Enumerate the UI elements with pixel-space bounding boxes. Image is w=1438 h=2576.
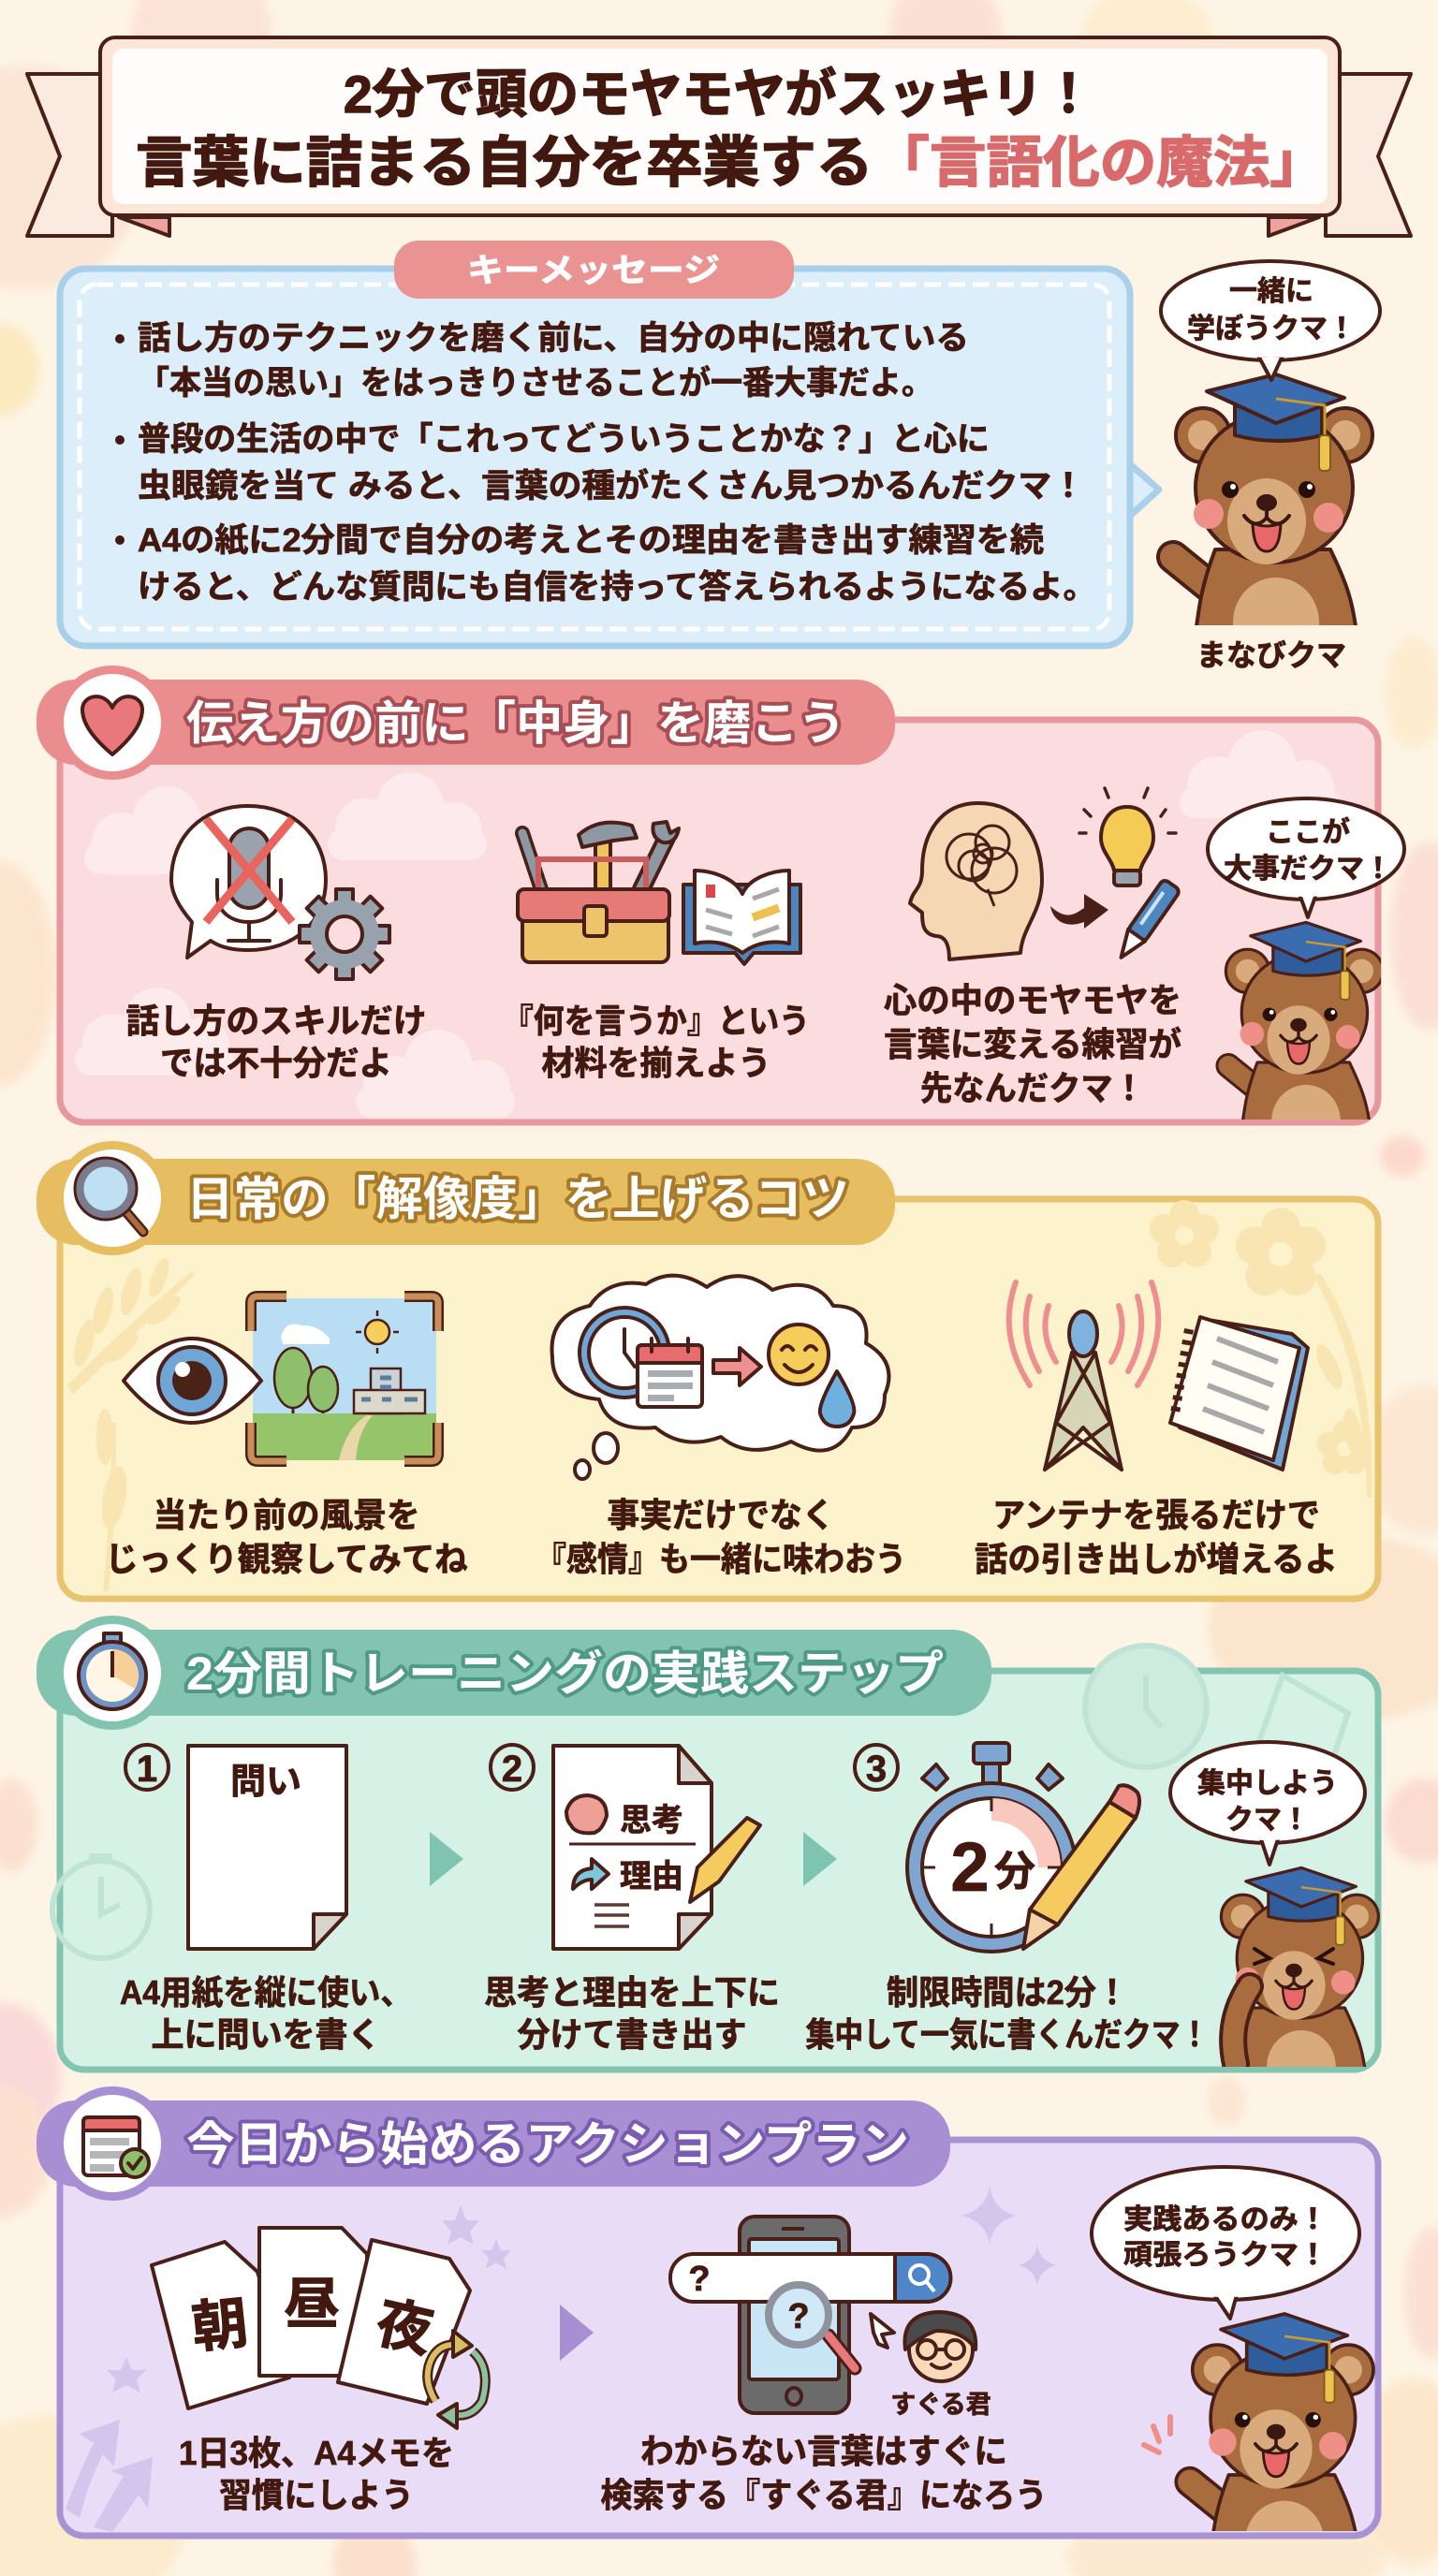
bear speech bubble: 学ぼうクマ！: [1187, 314, 1356, 344]
icon: big pencil: [1023, 1785, 1139, 1949]
caption 3: 言葉に変える練習が: [884, 1025, 1181, 1063]
caption 3: 先なんだクマ！: [920, 1069, 1145, 1107]
paper 2 folds: [679, 1746, 712, 1949]
step 1 number: [125, 1745, 169, 1790]
label: suguru: すぐる君: [890, 2391, 991, 2419]
bear name: まなびクマ: [1196, 638, 1346, 672]
header pill: [37, 1159, 895, 1245]
step 1 number: 1: [137, 1749, 157, 1790]
ribbon fold left: [119, 217, 169, 236]
ribbon left: [27, 74, 112, 236]
header pill: [37, 2100, 950, 2187]
arrow: [560, 2305, 594, 2361]
dashed inner line: [80, 285, 1109, 629]
caption 1: 話し方のスキルだけ: [125, 1002, 427, 1040]
step 3 number: 3: [866, 1749, 887, 1790]
heading: 伝え方の前に「中身」を磨こう: [186, 697, 845, 750]
panel: section 2: [37, 1141, 1378, 1599]
caption 1: [179, 2434, 454, 2514]
bear speech bubble: 一緒に: [1229, 276, 1313, 307]
speech bubble: section 4: 頑張ろうクマ！: [1123, 2240, 1328, 2271]
caption 3: [805, 1973, 1210, 2054]
icon: morning page: [152, 2242, 289, 2408]
icon: head with tangled thoughts: [910, 803, 1042, 959]
caption 2: 『感情』も一緒に味わおう: [536, 1540, 906, 1578]
bullets text: けると、どんな質問にも自信を持って答えられるようになるよ。: [138, 569, 1096, 606]
caption 3: 制限時間は2分！: [887, 1973, 1128, 2012]
caption 1: 1日3枚、A4メモを: [179, 2434, 454, 2472]
pointer: [1129, 463, 1159, 517]
caption 2: 材料を揃えよう: [541, 1044, 771, 1082]
arrow 1: [430, 1832, 463, 1886]
panel box: [60, 2140, 1378, 2536]
header circle: [55, 666, 169, 780]
arrow 2: [803, 1832, 837, 1886]
watermark clocks and document: [52, 1646, 1348, 1958]
header circle inner: [64, 1149, 161, 1247]
caption 2: [536, 1496, 906, 1578]
icon: calendar: [638, 1339, 702, 1407]
icon: pencil: [690, 1818, 760, 1902]
caption 3: [884, 981, 1181, 1107]
speech bubble: section 3: [1170, 1742, 1365, 1865]
speech bubble: section 4: 実践あるのみ！: [1123, 2204, 1328, 2235]
header pill: [37, 1630, 991, 1716]
icon: night page: [338, 2240, 470, 2404]
paper 2 brain: [566, 1795, 607, 1833]
icon: arrow to idea: [1050, 894, 1108, 929]
message box: [60, 269, 1130, 646]
panel box: [60, 1671, 1378, 2070]
header circle inner: [64, 674, 161, 771]
caption 3: 話の引き出しが増えるよ: [975, 1540, 1338, 1578]
panel: key message: [60, 241, 1159, 646]
caption 2: 検索する『すぐる君』になろう: [601, 2476, 1047, 2514]
header circle inner: [64, 2095, 161, 2192]
bullets text: A4の紙に2分間で自分の考えとその理由を書き出す練習を続: [138, 522, 1044, 559]
header pill: [37, 680, 895, 765]
icon: cycle arrows: [428, 2331, 485, 2428]
caption 3: アンテナを張るだけで: [992, 1496, 1320, 1534]
panel: section 3: [37, 1616, 1378, 2102]
bear: section 1: [1215, 921, 1381, 1120]
step 2 number: 2: [502, 1749, 522, 1790]
caption 3: [975, 1496, 1338, 1578]
icon: pen: [1112, 879, 1181, 963]
caption 2: わからない言葉はすぐに: [640, 2432, 1007, 2470]
icon: stopwatch: [907, 1743, 1076, 1952]
icon: magnifier on phone: ?: [787, 2297, 810, 2336]
icon: cursor: [871, 2314, 894, 2348]
icon: thought cloud: [552, 1276, 889, 1479]
step 2 number: [491, 1745, 534, 1790]
icon: crossed microphone bubble: [171, 806, 326, 958]
caption 1: 上に問いを書く: [152, 2015, 380, 2054]
speech bubble: section 3: 集中しよう: [1197, 1768, 1338, 1799]
icon: notebook: [1170, 1317, 1308, 1470]
paper 2: [553, 1746, 712, 1949]
icon: boy suguru: [904, 2312, 976, 2381]
icon: landscape frame: [251, 1296, 438, 1461]
heading: 2分間トレーニングの実践ステップ: [186, 1647, 944, 1700]
header circle inner: [64, 1624, 161, 1721]
icon: antenna tower: [1009, 1282, 1158, 1470]
caption 1: A4用紙を縦に使い、: [120, 1973, 412, 2012]
bullets text: [115, 320, 1096, 606]
icon: magnifier: [75, 1158, 143, 1232]
header circle: [55, 2086, 169, 2201]
icon: search bar: [670, 2254, 951, 2302]
caption 1: では不十分だよ: [160, 1044, 392, 1082]
bullets text: 普段の生活の中で「これってどういうことかな？」と心に: [138, 421, 990, 458]
icon: eye: [124, 1339, 261, 1423]
title banner: [27, 37, 1411, 236]
page labels: 昼: [284, 2273, 340, 2335]
bullets text: 話し方のテクニックを磨く前に、自分の中に隠れている: [138, 320, 969, 357]
step 3 number: [855, 1745, 898, 1790]
page labels: [189, 2273, 439, 2364]
icon: gear: [300, 889, 389, 979]
paper 2 arrow: [573, 1859, 609, 1889]
caption 2: 分けて書き出す: [517, 2015, 747, 2054]
icon: magnifier on phone: [769, 2285, 855, 2368]
panel: section 4: [37, 2086, 1378, 2576]
bullets text: 虫眼鏡を当て みると、言葉の種がたくさん見つかるんだクマ！: [138, 468, 1085, 505]
speech bubble: section 1: [1208, 798, 1404, 917]
title line 1: 2分で頭のモヤモヤがスッキリ！: [344, 65, 1094, 124]
speech bubble: section 1: ここが: [1266, 816, 1350, 848]
speech bubble: section 4: [1092, 2167, 1359, 2319]
caption 1: [105, 1496, 468, 1578]
icon: light bulb: [1079, 788, 1176, 886]
sparkles and arrows: [66, 2186, 1056, 2532]
paper 1: [188, 1746, 346, 1949]
caption 2: [601, 2432, 1047, 2514]
caption 3: 心の中のモヤモヤを: [884, 981, 1181, 1019]
icon: open book: [683, 871, 800, 964]
icon: toolbox: [518, 822, 679, 962]
icon: clock: [580, 1308, 669, 1398]
icon: smile: [769, 1325, 829, 1384]
heading: 日常の「解像度」を上げるコツ: [186, 1173, 849, 1225]
banner inner: [112, 49, 1328, 204]
title line 2: 言葉に詰まる自分を卒業する 「言語化の魔法」: [136, 132, 1327, 194]
speech bubble: section 3: クマ！: [1225, 1805, 1310, 1836]
bear: manabi kuma: [1173, 374, 1372, 667]
icon: heart: [82, 696, 142, 754]
caption 1: 当たり前の風景を: [154, 1496, 419, 1534]
caption 2: 『何を言うか』という: [503, 1002, 810, 1040]
caption 1: じっくり観察してみてね: [105, 1540, 468, 1578]
paper 2 label: thought: 思考: [620, 1803, 683, 1838]
paper 2 divider: [569, 1842, 696, 1846]
icon: smartphone: [740, 2217, 849, 2413]
header circle: [55, 1616, 169, 1730]
speech bubble: section 1: 大事だクマ！: [1224, 854, 1392, 885]
bear: section 4: [1190, 2314, 1373, 2576]
heading: 今日から始めるアクションプラン: [186, 2118, 909, 2171]
paper 2 list: [594, 1905, 629, 1926]
panel box: [60, 720, 1378, 1122]
panel box: [60, 1199, 1378, 1599]
icon: stopwatch: 分: [994, 1849, 1035, 1895]
bullets text: 「本当の思い」をはっきりさせることが一番大事だよ。: [138, 365, 933, 402]
icon: tear drop: [820, 1371, 854, 1427]
caption 1: [120, 1973, 412, 2054]
caption 1: 習慣にしよう: [219, 2476, 414, 2514]
panel: section 1: [37, 666, 1404, 1157]
paper 1 label: 問い: [230, 1763, 301, 1802]
ribbon right: [1326, 74, 1411, 236]
icon: noon page: [259, 2228, 367, 2376]
icon: stopwatch small: [79, 1633, 146, 1709]
paper 1 fold: [314, 1914, 346, 1949]
floral decoration: [67, 1200, 1372, 1591]
caption 1: [125, 1002, 427, 1082]
tab label: キーメッセージ: [467, 253, 720, 289]
icon: search bar: ?: [688, 2260, 711, 2299]
clouds: [75, 730, 1339, 1118]
bear: section 3: [1219, 1866, 1380, 2067]
page labels: 朝: [189, 2291, 251, 2360]
icon: calendar check: [83, 2117, 149, 2177]
bear speech bubble: [1161, 261, 1380, 380]
tab: [394, 241, 794, 299]
caption 2: 事実だけでなく: [607, 1496, 835, 1534]
paper 2 label: reason: 理由: [620, 1859, 683, 1895]
caption 2: [503, 1002, 810, 1082]
ribbon fold right: [1269, 217, 1319, 236]
header circle: [55, 1141, 169, 1255]
icon: arrow: [713, 1348, 761, 1385]
icon: stopwatch: 2: [950, 1828, 990, 1906]
page labels: 夜: [370, 2291, 439, 2364]
caption 2: 思考と理由を上下に: [484, 1973, 780, 2012]
caption 3: 集中して一気に書くんだクマ！: [805, 2015, 1210, 2054]
motion lines: [1144, 2417, 1170, 2452]
banner plate: [100, 37, 1340, 215]
caption 2: [484, 1973, 780, 2054]
